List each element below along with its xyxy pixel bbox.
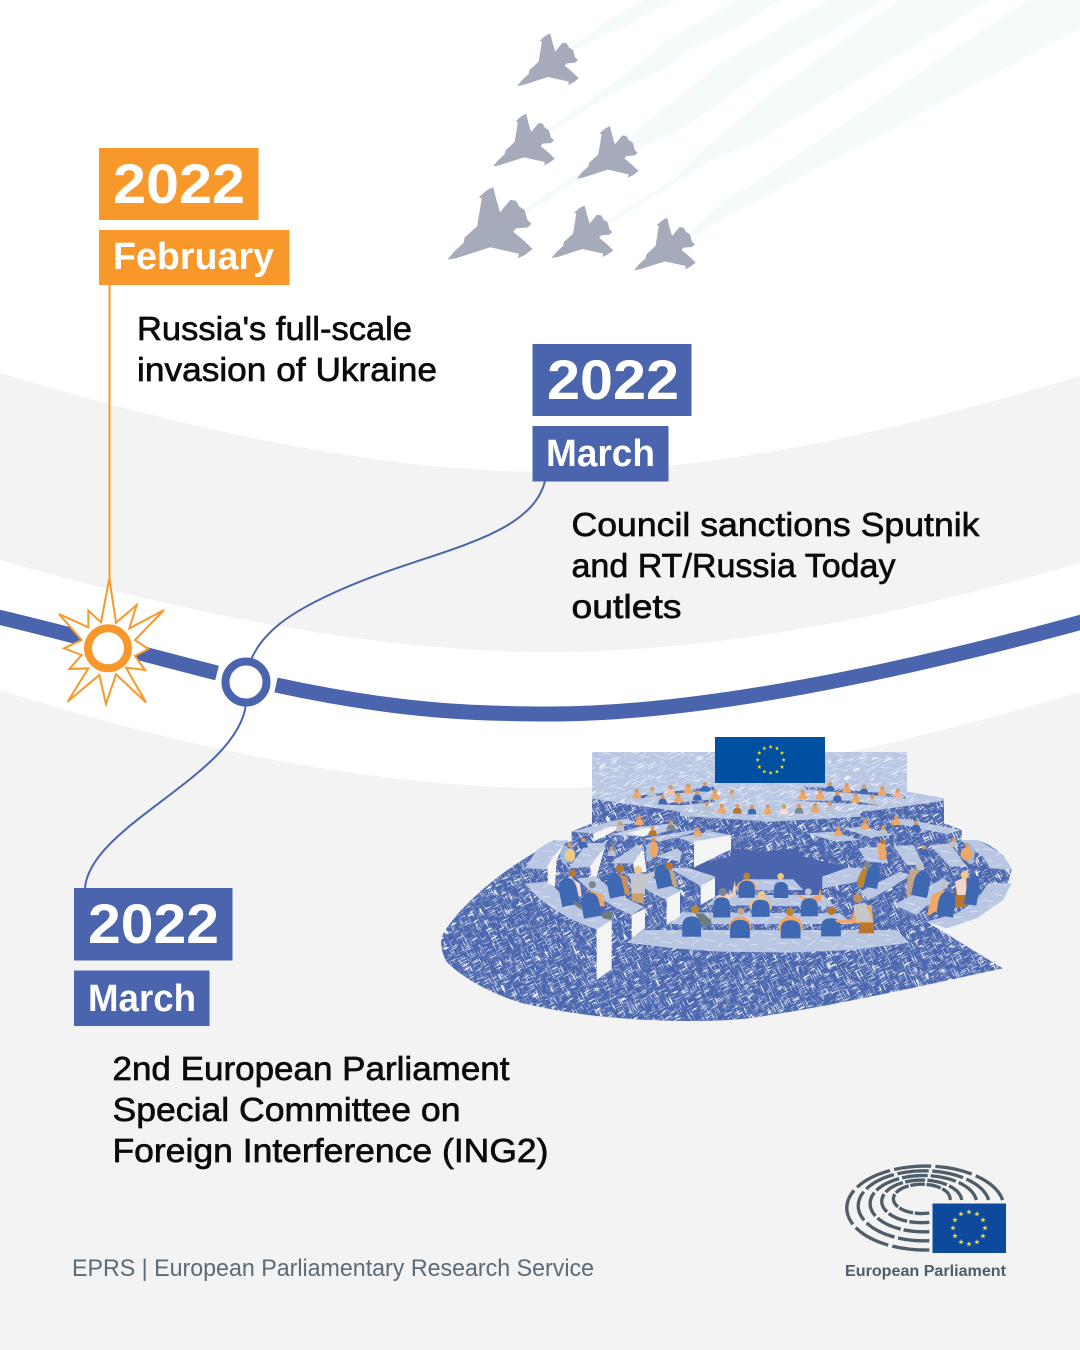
illustration: parliament chamber — [441, 737, 1012, 1021]
label: 2022 February — [99, 148, 290, 285]
footer source: EPRS | European Parliamentary Research Service — [72, 1255, 594, 1282]
text: special committee: 2nd European Parliament — [112, 1051, 510, 1088]
blue connector: ING2 — [85, 704, 246, 888]
text: sanctions — [572, 507, 980, 626]
label: 2022 March (Council) — [532, 344, 692, 482]
text: invasion: invasion of Ukraine — [137, 352, 437, 389]
text: special committee: Foreign Interference (ING2) — [112, 1133, 548, 1170]
logo: European Parliament: European Parliament — [845, 1263, 1007, 1280]
EU flag — [715, 737, 825, 783]
text: sanctions: Council sanctions Sputnik — [572, 507, 980, 544]
label: 2022 February: 2022 — [113, 152, 245, 215]
label: 2022 March (ING2): March — [88, 978, 196, 1020]
seated members, front rows — [557, 861, 981, 938]
blue connector: Council — [250, 481, 545, 662]
jets formation — [447, 33, 696, 270]
orange connector — [108, 285, 110, 590]
white partitions — [547, 825, 731, 980]
seated members, back rows — [560, 782, 975, 864]
central floor — [687, 848, 848, 897]
text: sanctions: and RT/Russia Today — [572, 548, 896, 585]
text: invasion — [137, 311, 437, 389]
icon: blue ring marker — [226, 662, 266, 702]
desks — [525, 812, 1012, 953]
contrails — [523, 0, 1080, 236]
timeline line — [0, 617, 1080, 714]
text: special committee: Special Committee on — [112, 1092, 461, 1129]
icon: orange burst marker — [59, 578, 164, 704]
text: invasion: Russia's full-scale — [137, 311, 412, 348]
text: sanctions: outlets — [572, 589, 682, 626]
label: 2022 February: February — [113, 236, 274, 278]
chamber floor — [441, 786, 1012, 1021]
text: special committee — [112, 1051, 548, 1170]
back wall — [592, 752, 944, 818]
label: 2022 March (ING2) — [74, 888, 232, 1026]
label: 2022 March (Council): 2022 — [547, 348, 679, 411]
label: 2022 March (Council): March — [546, 433, 655, 475]
logo: European Parliament — [845, 1166, 1007, 1280]
label: 2022 March (ING2): 2022 — [88, 892, 219, 955]
